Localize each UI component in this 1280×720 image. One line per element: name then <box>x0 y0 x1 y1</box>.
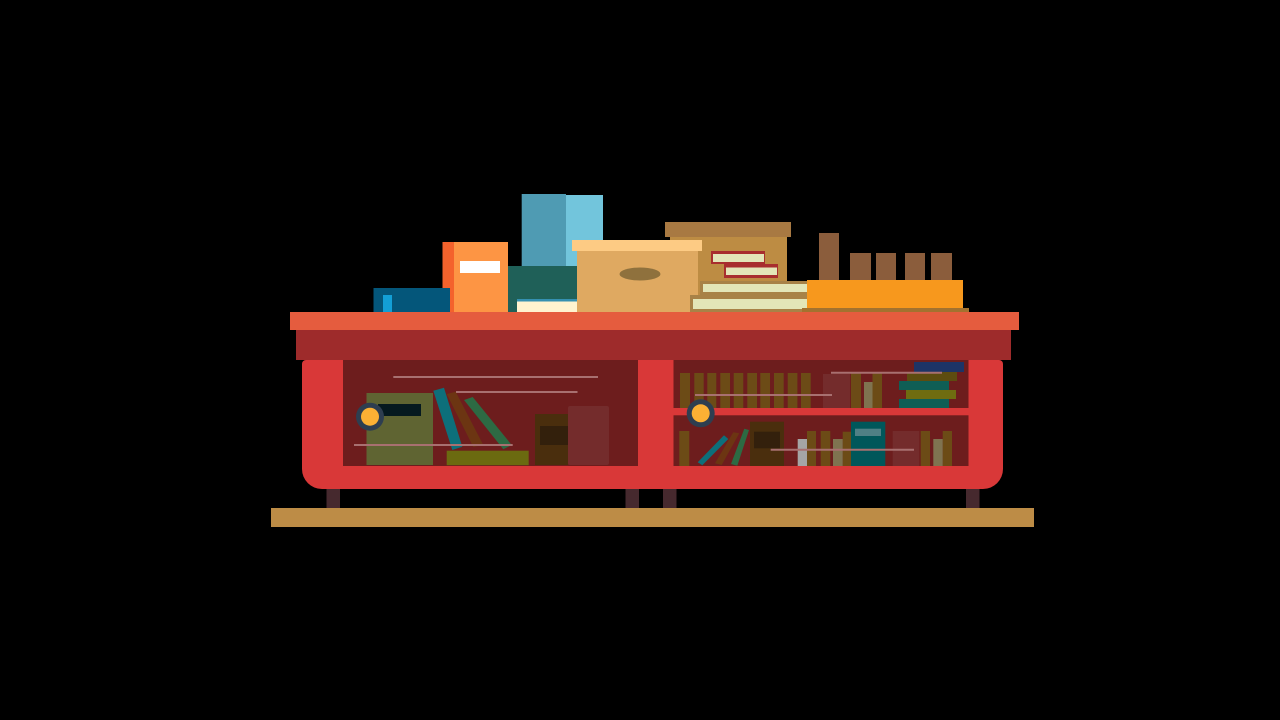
lower shelf left book <box>679 431 689 466</box>
cabinet legs <box>326 488 980 508</box>
cream book stack <box>690 281 807 312</box>
olive box <box>366 393 433 465</box>
navy book <box>374 288 450 312</box>
lower shelf middle books <box>798 431 851 466</box>
flat olive book <box>447 451 529 465</box>
dark red box <box>568 406 609 465</box>
back cardboard box <box>665 222 791 295</box>
right door knob <box>687 399 715 427</box>
cabinet top band <box>296 330 1011 360</box>
compartment backs <box>674 360 968 466</box>
front cardboard box <box>572 240 702 312</box>
lower shelf right books <box>921 431 952 466</box>
left compartment <box>343 360 638 466</box>
tall blue book <box>522 194 603 266</box>
right compartment <box>674 360 968 466</box>
lower shelf leaning books <box>698 429 749 466</box>
glass reflection lines <box>354 373 942 450</box>
brown box <box>535 414 568 465</box>
upper shelf row of books <box>680 373 811 408</box>
lower shelf brown box <box>750 422 784 466</box>
floor plank <box>271 508 1034 527</box>
upper shelf dark red box and books <box>823 373 882 408</box>
table top <box>290 312 1019 330</box>
leaning books <box>433 388 512 450</box>
red-bound books in box <box>711 251 778 278</box>
orange notebook <box>442 242 508 312</box>
compartment back <box>343 360 638 466</box>
dark green book <box>508 266 578 312</box>
teal book <box>851 422 885 466</box>
cabinet body <box>302 360 1003 489</box>
lower shelf dark red box <box>893 431 919 466</box>
orange tray <box>802 280 969 312</box>
left door knob <box>356 403 384 431</box>
brown posts <box>819 233 952 280</box>
upper shelf stacked books <box>899 362 964 408</box>
